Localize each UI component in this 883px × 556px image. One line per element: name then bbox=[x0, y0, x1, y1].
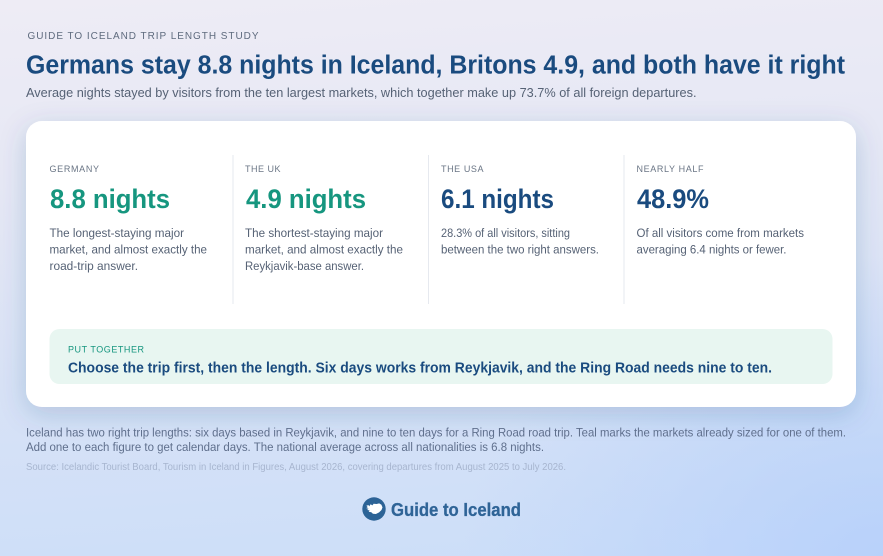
explanatory note: Iceland has two right trip lengths: six days based in Reykjavik, and nine to ten days for a Ring Road road trip. Teal marks the markets already sized for one of them. bbox=[26, 426, 846, 440]
logo: Guide to Iceland bbox=[362, 497, 521, 521]
stat: the USA bbox=[441, 164, 599, 256]
stat: the UK: market, and almost exactly the bbox=[245, 242, 403, 256]
stat: nearly half: 48.9% bbox=[637, 184, 709, 214]
stat: Germany bbox=[50, 164, 207, 273]
stat: the USA: 28.3% of all visitors, sitting bbox=[441, 226, 570, 240]
callout: put together: PUT TOGETHER bbox=[68, 344, 144, 354]
stat: nearly half: averaging 6.4 nights or fewer. bbox=[636, 242, 786, 256]
eyebrow: GUIDE TO ICELAND TRIP LENGTH STUDY bbox=[28, 31, 259, 42]
callout: put together: Choose the trip first, then the length. Six days works from Reykjavik, and the Ring Road needs nine to ten. bbox=[68, 360, 772, 376]
stat: the USA: THE USA bbox=[441, 164, 484, 174]
title: Germans stay 8.8 nights in Iceland, Britons 4.9, and both have it right bbox=[26, 52, 845, 80]
stat: nearly half: NEARLY HALF bbox=[636, 164, 704, 174]
stat: the UK: The shortest-staying major bbox=[245, 226, 383, 240]
explanatory note: Add one to each figure to get calendar days. The national average across all nationalities is 6.8 nights. bbox=[26, 440, 544, 454]
stat: the UK: THE UK bbox=[245, 164, 280, 174]
stat: Germany: market, and almost exactly the bbox=[50, 242, 207, 256]
source: Source: Icelandic Tourist Board, Tourism in Iceland in Figures, August 2026, covering departures from August 2025 to July 2026. bbox=[26, 462, 566, 473]
panel: main card bbox=[26, 121, 856, 407]
stat: the UK: 4.9 nights bbox=[246, 184, 366, 214]
explanatory note bbox=[26, 426, 846, 454]
stat: the USA: between the two right answers. bbox=[441, 242, 599, 256]
subtitle: Average nights stayed by visitors from the ten largest markets, which together make up 73.7% of all foreign departures. bbox=[26, 85, 696, 100]
stat: Germany: The longest-staying major bbox=[50, 226, 184, 240]
stat: Germany: road-trip answer. bbox=[50, 259, 138, 273]
stat: the UK: Reykjavik-base answer. bbox=[245, 259, 364, 273]
stat: the USA: 6.1 nights bbox=[441, 184, 554, 214]
stat: the UK bbox=[245, 164, 403, 273]
stat: nearly half: Of all visitors come from markets bbox=[636, 226, 804, 240]
callout: put together bbox=[50, 329, 832, 384]
icon: Iceland in circle bbox=[362, 497, 386, 521]
stat: Germany: GERMANY bbox=[50, 164, 99, 174]
stat: nearly half bbox=[636, 164, 804, 256]
stat: Germany: 8.8 nights bbox=[50, 184, 170, 214]
logo: Guide to Iceland: Guide to Iceland bbox=[391, 499, 521, 520]
